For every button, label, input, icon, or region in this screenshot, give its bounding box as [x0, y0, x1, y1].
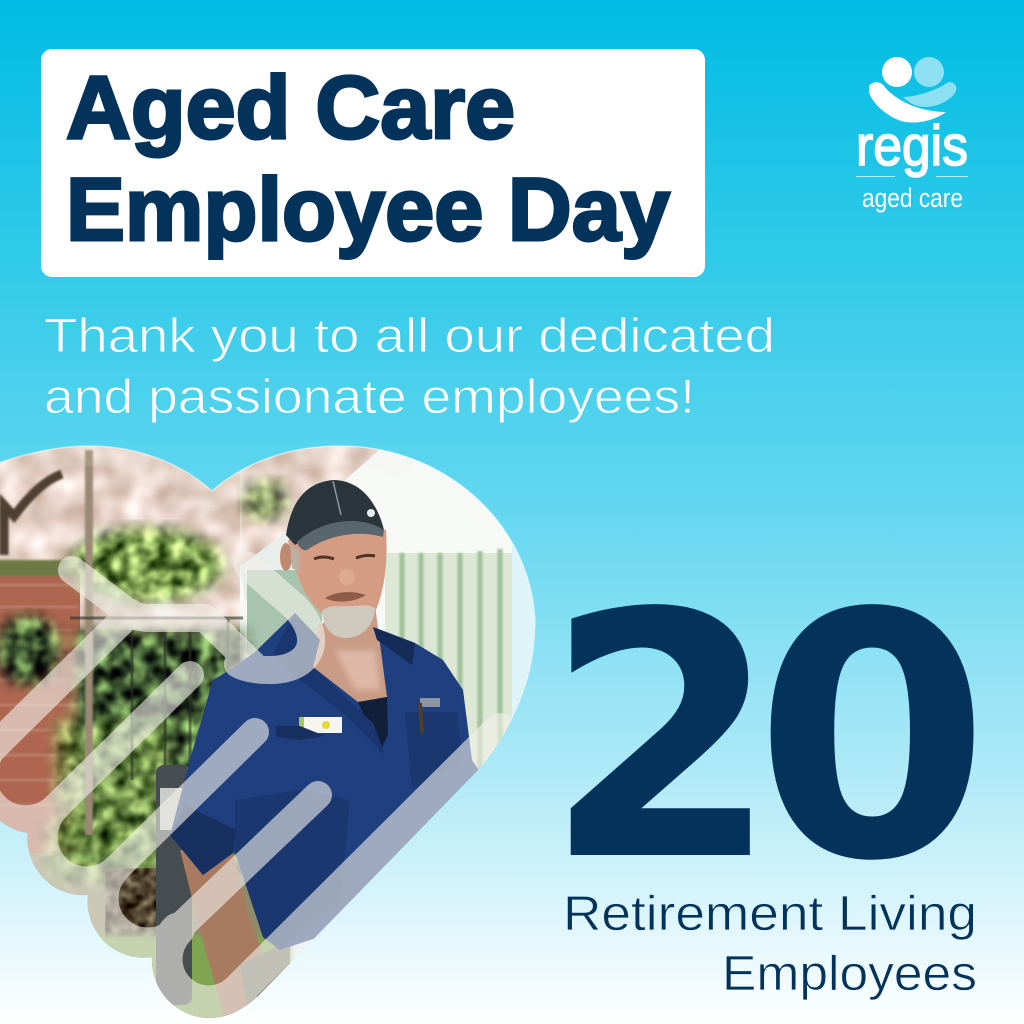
shirt — [170, 613, 482, 950]
cap — [286, 480, 384, 545]
beard — [322, 605, 375, 638]
logo subtitle: aged care — [862, 183, 963, 213]
big number 20: 20 — [544, 541, 990, 935]
undershirt — [358, 697, 388, 752]
logo: regis aged care — [856, 57, 968, 213]
heart rim — [0, 446, 535, 628]
title line 2: Employee Day — [66, 159, 670, 259]
employee — [170, 480, 482, 1020]
subtitle: Thank you to all our dedicated — [44, 310, 775, 363]
name tag — [299, 717, 342, 733]
shirt logo and pen — [420, 698, 440, 733]
logo icon — [869, 57, 956, 123]
foliage — [68, 527, 224, 603]
subtitle: and passionate employees! — [44, 371, 695, 424]
collars — [273, 613, 385, 755]
bollard — [156, 765, 192, 1005]
neck and chest — [313, 605, 387, 702]
face — [288, 529, 387, 614]
subtitle — [44, 310, 775, 424]
heart photo of employee — [0, 440, 542, 1024]
brick wall — [0, 563, 80, 853]
caption: Employees — [722, 947, 977, 1001]
logo wordmark: regis — [856, 114, 968, 178]
translucent hand stripes — [0, 446, 500, 1018]
caption — [563, 887, 977, 1001]
photo background: garden and fence — [0, 440, 542, 1024]
title line 1: Aged Care — [66, 57, 515, 157]
title panel — [41, 49, 705, 277]
forearm — [180, 850, 262, 1020]
caption: Retirement Living — [563, 887, 977, 941]
